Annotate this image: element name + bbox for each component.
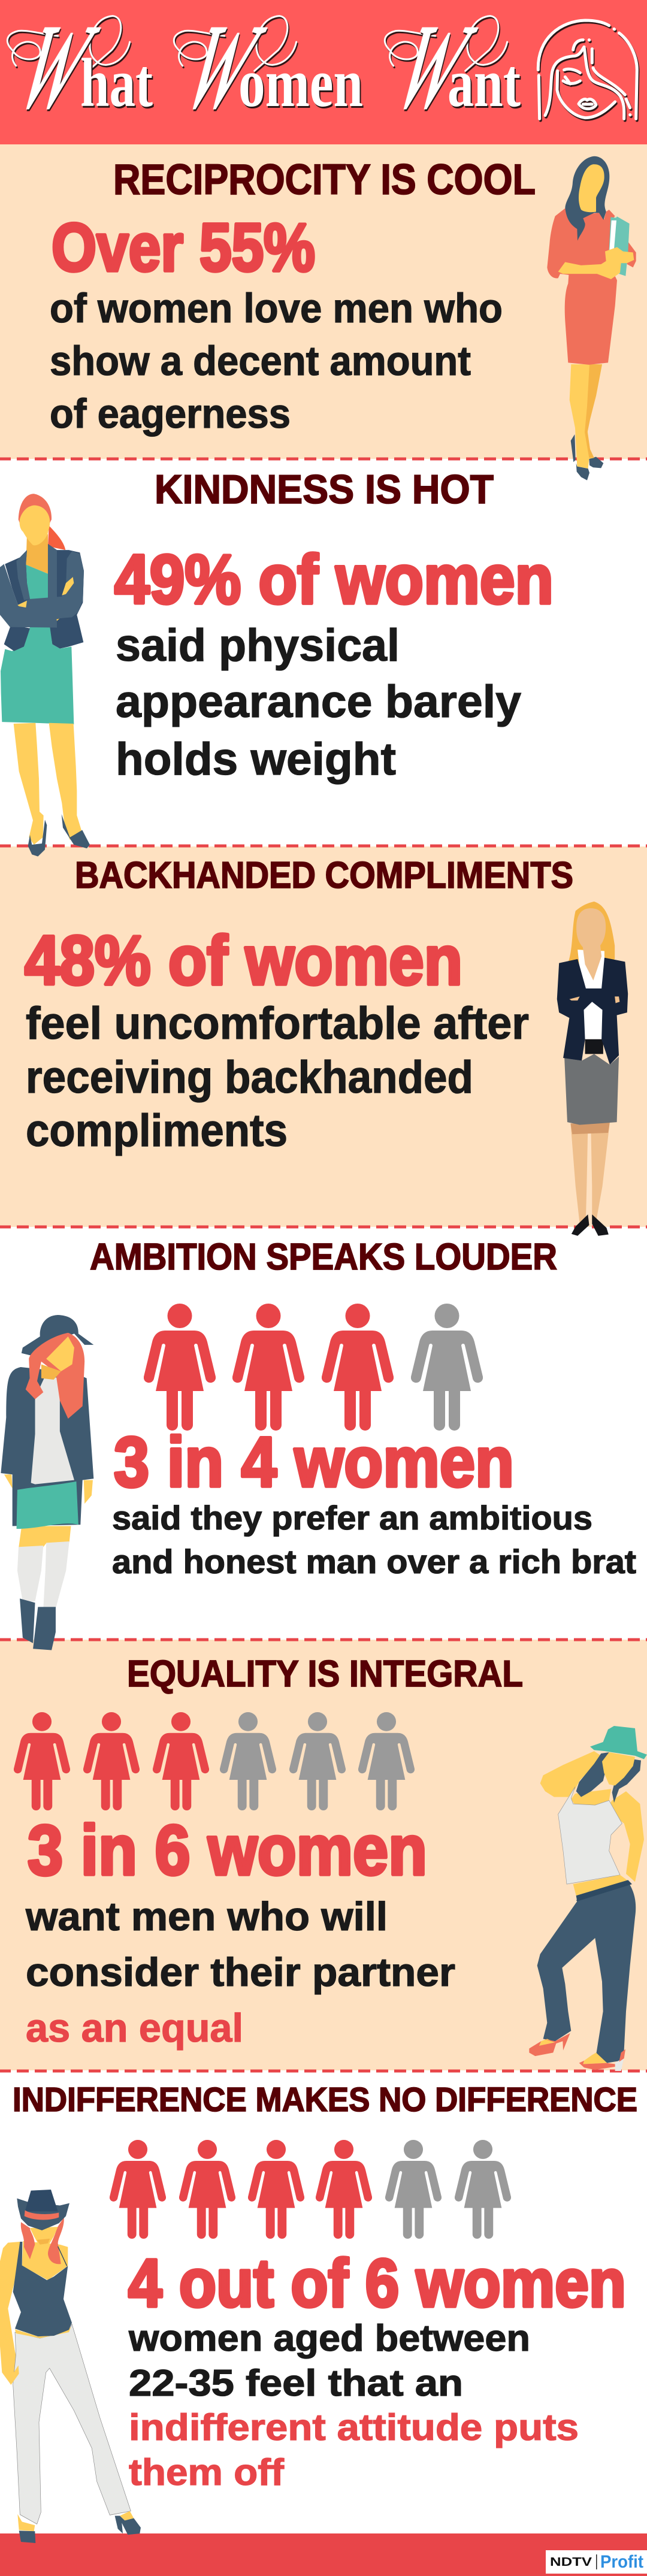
panel: equality xyxy=(14,1653,647,2071)
title text: Want: W xyxy=(382,0,488,133)
panel: indifference xyxy=(0,2081,637,2543)
body text: of women love men who xyxy=(50,285,503,331)
logo: NDTV Profit: NDTV xyxy=(550,2556,592,2569)
body text xyxy=(50,285,503,437)
title text: What: hat xyxy=(80,45,153,122)
panel background: reciprocity xyxy=(0,144,647,459)
body text: indifferent attitude puts xyxy=(129,2407,579,2448)
header band xyxy=(0,0,647,144)
title text: What: W xyxy=(4,0,110,133)
pictogram: 3 of 4 women xyxy=(144,1304,483,1431)
logo: NDTV Profit: Profit xyxy=(600,2552,643,2572)
panel: reciprocity xyxy=(50,156,636,480)
title xyxy=(4,0,637,133)
body text: of eagerness xyxy=(50,391,291,437)
pictogram: 3 of 6 women xyxy=(14,1712,415,1810)
body text: said they prefer an ambitious xyxy=(112,1499,592,1537)
panel background: backhanded compliments xyxy=(0,846,647,1227)
panel: kindness xyxy=(0,467,554,857)
footer band xyxy=(0,2533,647,2576)
body text: receiving backhanded xyxy=(26,1052,473,1103)
title text: Women: W xyxy=(171,0,277,133)
figure: blonde woman in navy blazer and grey skirt xyxy=(557,902,628,1236)
panel: ambition xyxy=(1,1236,636,1650)
figure: woman in teal hat and jeans xyxy=(529,1726,647,2071)
body text: want men who will xyxy=(25,1894,388,1939)
panel: backhanded compliments xyxy=(25,855,628,1236)
heading: BACKHANDED COMPLIMENTS xyxy=(75,855,573,896)
icon: woman face line art xyxy=(538,20,637,119)
figure: woman in hat and long coat xyxy=(1,1315,93,1650)
body text: 22-35 feel that an xyxy=(129,2363,463,2404)
stat: 49% of women xyxy=(114,540,554,618)
stat: 48% of women xyxy=(25,921,462,999)
panel background: indifference xyxy=(0,2070,647,2533)
title text: Women: omen xyxy=(238,45,363,122)
heading: KINDNESS IS HOT xyxy=(155,467,494,512)
heading: AMBITION SPEAKS LOUDER xyxy=(90,1236,557,1278)
figure: woman in teal dress with arms crossed xyxy=(0,494,90,857)
logo: NDTV Profit xyxy=(546,2550,647,2574)
body text xyxy=(26,998,529,1156)
body text: show a decent amount xyxy=(50,338,471,384)
body text xyxy=(25,1894,455,2051)
panel background: equality xyxy=(0,1640,647,2070)
body text: feel uncomfortable after xyxy=(26,998,529,1049)
stat: 3 in 4 women xyxy=(114,1423,514,1502)
body text xyxy=(128,2318,579,2493)
body text: consider their partner xyxy=(26,1950,455,1995)
heading: RECIPROCITY IS COOL xyxy=(113,156,536,204)
body text: said physical xyxy=(116,620,400,671)
body text: holds weight xyxy=(116,734,396,785)
body text: appearance barely xyxy=(116,676,521,727)
figure: woman in coral dress holding book xyxy=(547,156,636,480)
body text xyxy=(112,1499,636,1580)
stat: 3 in 6 women xyxy=(28,1811,427,1890)
panel background: ambition xyxy=(0,1227,647,1640)
body text: as an equal xyxy=(26,2006,243,2051)
body text: women aged between xyxy=(128,2318,530,2359)
stat: Over 55% xyxy=(52,210,315,285)
body text: them off xyxy=(129,2452,284,2493)
body text: and honest man over a rich brat xyxy=(112,1543,636,1580)
title text: Want: ant xyxy=(448,45,521,122)
body text xyxy=(116,620,521,785)
body text: compliments xyxy=(26,1105,288,1156)
panel background: kindness xyxy=(0,459,647,846)
figure: woman in cowboy hat and white trousers xyxy=(0,2190,141,2543)
pictogram: 4 of 6 women xyxy=(110,2140,511,2239)
heading: EQUALITY IS INTEGRAL xyxy=(127,1653,523,1695)
